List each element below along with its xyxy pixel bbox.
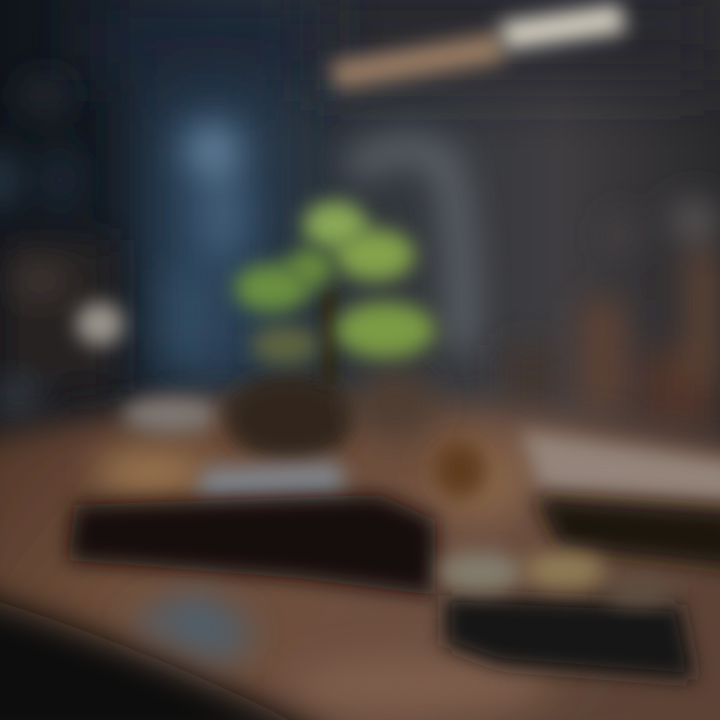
wooden table (0, 397, 720, 720)
left dark shelf clutter (0, 77, 115, 418)
small amber jar (434, 442, 486, 498)
blue glow behind plant (90, 0, 320, 380)
grey arch on wall (350, 150, 462, 350)
pale light spot on wall (170, 124, 248, 360)
right stack of books (520, 430, 720, 568)
ceiling light strip (330, 4, 626, 90)
jars at lower right (438, 552, 695, 680)
white tray on desk (195, 462, 345, 500)
plant leaves and stem (234, 201, 435, 385)
right background figures (505, 200, 720, 430)
blue-grey reflection on table (125, 590, 255, 665)
plant pot (224, 369, 435, 462)
white object at left (76, 302, 124, 346)
foreground dark table edge (0, 590, 350, 720)
upper wall shadow (300, 0, 720, 80)
dark book on desk (68, 495, 435, 595)
